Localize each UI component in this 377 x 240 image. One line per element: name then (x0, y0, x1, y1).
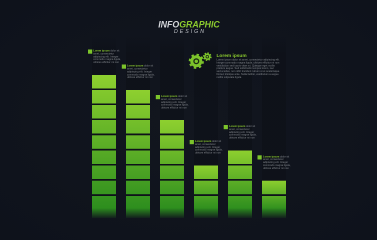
panel text: Donec tristique ante. Nulla facilisi, vestibulum a augue (216, 72, 279, 76)
title: INFOGRAPHIC (158, 20, 220, 30)
callout 1: ultrices efficitur mi non (93, 60, 120, 64)
callout 3: Lorem ipsum dolor sit (161, 94, 187, 98)
callout 6: commodo magna ligula, (263, 163, 291, 167)
callout 5: commodo magna ligula, (229, 133, 257, 137)
callout 5 (224, 124, 257, 140)
callout 1: commodo magna ligula, (93, 57, 121, 61)
callout 2: amet, consectetur (127, 66, 148, 70)
callout 4: commodo magna ligula, (195, 148, 223, 152)
callout 6 (258, 154, 291, 170)
callout 5: Lorem ipsum dolor sit (229, 124, 255, 128)
callout 4: adipiscing elit. Integer (195, 145, 220, 149)
panel text: Lorem ipsum dolor sit amet, consectetur adipiscing elit. (216, 58, 280, 62)
panel text: pretium augue. Sed sollicitudin tempus lorem, nec (216, 66, 275, 70)
callout 3: commodo magna ligula, (161, 103, 189, 107)
callout 2: ultrices efficitur mi non (127, 75, 153, 79)
callout 5: adipiscing elit. Integer (229, 130, 254, 134)
callout 4: Lorem ipsum dolor sit (195, 139, 221, 143)
panel text: mollis vulputate ligula. (216, 75, 242, 79)
callout 1: adipiscing elit. Integer (93, 54, 119, 58)
icon: gears (190, 53, 211, 68)
callout 5: ultrices efficitur mi non (229, 136, 255, 140)
callout 1: Lorem ipsum dolor sit (93, 48, 120, 52)
callout 1: amet, consectetur (93, 51, 114, 55)
callout 3: ultrices efficitur mi non (161, 106, 187, 110)
panel text: Integer commodo magna ligula, ultrices efficitur mi non (216, 60, 280, 64)
callout 2 (122, 64, 155, 79)
callout 2: Lorem ipsum dolor sit (127, 64, 153, 68)
callout 4 (190, 139, 223, 155)
panel text (216, 58, 280, 79)
callout 6: ultrices efficitur mi non (263, 166, 289, 170)
callout 3 (156, 94, 189, 110)
callout 1 (88, 48, 121, 64)
callout 6: amet, consectetur (263, 157, 284, 161)
callout 6: adipiscing elit. Integer (263, 160, 288, 164)
bar 3 (160, 120, 184, 218)
panel heading: Lorem ipsum (216, 53, 247, 59)
callout 4: amet, consectetur (195, 142, 216, 146)
bar 5 (228, 150, 252, 218)
callout 6: Lorem ipsum dolor sit (263, 154, 289, 158)
callout 5: amet, consectetur (229, 127, 250, 131)
callout 3: amet, consectetur (161, 97, 182, 101)
callout 2: adipiscing elit. Integer (127, 69, 152, 73)
bar 6 (262, 181, 286, 218)
bar 2 (126, 90, 150, 218)
title (158, 20, 220, 35)
bar 1 (92, 75, 116, 218)
panel text: vestibulum sed turpis vitae mi. Quisque eget mollis (216, 63, 275, 67)
panel text: sed a tellus, non nibh tincidunt rutrum ut et scelerisque. (216, 69, 280, 73)
bar 4 (194, 166, 218, 218)
title: DESIGN (174, 29, 206, 35)
callout 4: ultrices efficitur mi non (195, 151, 221, 155)
callout 2: commodo magna ligula, (127, 72, 155, 76)
callout 3: adipiscing elit. Integer (161, 100, 186, 104)
